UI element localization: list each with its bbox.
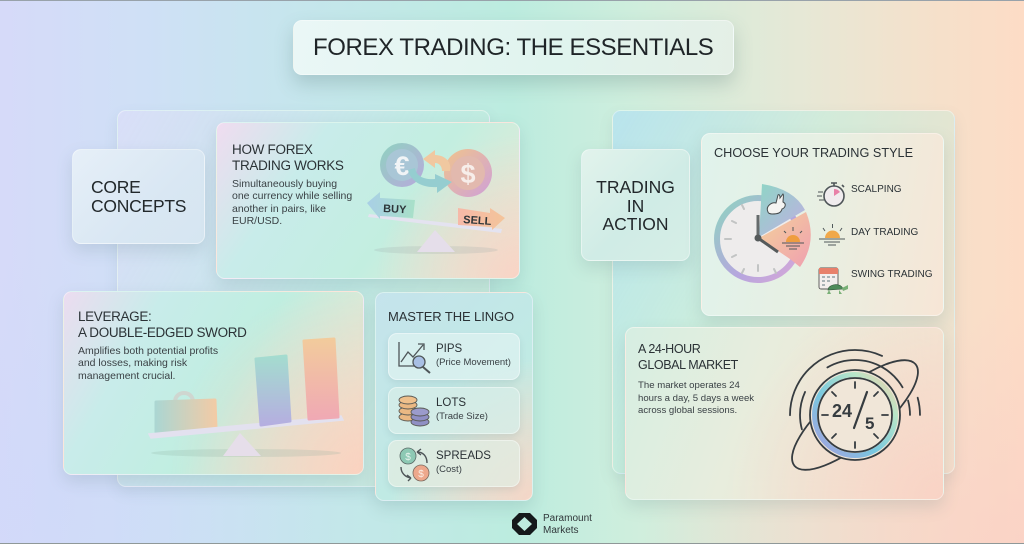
back panel: trading in action [612, 110, 955, 474]
label: brand name: Paramount [543, 513, 592, 524]
label: pips [436, 343, 511, 368]
label: scalping: SCALPING [851, 184, 902, 195]
label: lots: (Trade Size) [436, 411, 488, 422]
icon: currency exchange seesaw: SELL [463, 214, 492, 228]
label: brand name: Markets [543, 524, 579, 536]
text: how forex description [232, 178, 352, 227]
icon: 24/5 clock with orbits: 5 [865, 414, 874, 433]
icon: clock with sectors [714, 184, 811, 283]
row: lots [388, 387, 520, 434]
heading: 24-hour global market [638, 342, 738, 372]
heading: how forex trading works: HOW FOREX [232, 142, 313, 157]
text: how forex description: another in pairs, like [232, 203, 326, 215]
row: spreads [388, 440, 520, 487]
label: pips: PIPS [436, 343, 462, 355]
panel: leverage [63, 291, 364, 475]
icon: logo mark [512, 513, 537, 535]
label: spreads: SPREADS [436, 450, 491, 462]
icon: chart with magnifier [398, 342, 431, 374]
text: market hours description: across global sessions. [638, 405, 737, 416]
panel: trading in action label [581, 149, 690, 261]
label: spreads [436, 450, 491, 475]
label: spreads: (Cost) [436, 464, 462, 475]
heading: 24-hour global market: GLOBAL MARKET [638, 358, 738, 372]
panel: 24-hour global market [625, 327, 944, 500]
title: FOREX TRADING: THE ESSENTIALS [313, 34, 713, 61]
icon: rabbit [767, 194, 785, 214]
text: how forex description: EUR/USD. [232, 215, 282, 227]
style item: scalping [817, 182, 902, 207]
heading: how forex trading works: TRADING WORKS [232, 158, 344, 172]
row: pips [388, 333, 520, 380]
icon: calendar with turtle [818, 268, 848, 294]
logo: paramount markets [512, 513, 592, 536]
back panel: core concepts [117, 110, 490, 487]
text: leverage description: management crucial. [78, 370, 175, 382]
icon: coin stacks [398, 396, 430, 426]
text: how forex description: one currency while selling [232, 190, 352, 202]
icon: currency exchange seesaw: $ [460, 159, 476, 189]
label: lots [436, 397, 488, 422]
panel: choose your trading style [701, 133, 944, 316]
panel: trading in action label: TRADING [596, 177, 675, 197]
panel: core concepts label: CONCEPTS [91, 196, 186, 216]
heading: how forex trading works [232, 142, 344, 172]
text: market hours description: The market operates 24 [638, 380, 740, 391]
icon: 24/5 clock with orbits: 24 [832, 401, 852, 421]
label: day trading: DAY TRADING [851, 227, 918, 238]
icon: currency exchange seesaw: BUY [383, 203, 407, 216]
icon: sunrise [819, 224, 845, 246]
icon: 24/5 clock with orbits [789, 349, 921, 471]
text: leverage description [78, 345, 218, 382]
label: lots: LOTS [436, 397, 466, 409]
text: leverage description: Amplifies both potential profits [78, 345, 218, 357]
icon: coin exchange [400, 448, 430, 482]
style item: day trading [819, 224, 918, 246]
label: pips: (Price Movement) [436, 357, 511, 368]
label: swing trading: SWING TRADING [851, 269, 932, 280]
icon: currency exchange seesaw [367, 143, 505, 254]
text: leverage description: and losses, making risk [78, 357, 187, 369]
title [293, 20, 734, 75]
icon: coin exchange: $ [418, 469, 424, 480]
heading: leverage: A DOUBLE-EDGED SWORD [78, 324, 247, 340]
icon: currency exchange seesaw: € [394, 151, 410, 181]
heading: leverage [78, 309, 247, 340]
label: brand name [543, 513, 592, 536]
icon: leverage seesaw with bars [148, 338, 344, 457]
heading: master the lingo: MASTER THE LINGO [388, 309, 514, 324]
panel: master the lingo [375, 292, 533, 501]
panel: trading in action label: IN [627, 196, 644, 216]
icon: coin exchange: $ [405, 452, 411, 463]
heading: leverage: LEVERAGE: [78, 309, 151, 324]
style item: swing trading [818, 268, 932, 294]
panel: core concepts label: CORE [91, 177, 141, 197]
icon: stopwatch [817, 182, 845, 207]
panel: trading in action label: ACTION [602, 214, 669, 234]
panel: core concepts label [72, 149, 205, 244]
text: how forex description: Simultaneously buying [232, 178, 337, 190]
heading: 24-hour global market: A 24-HOUR [638, 342, 700, 356]
panel: how forex trading works [216, 122, 520, 279]
heading: choose your trading style: CHOOSE YOUR TRADING STYLE [714, 146, 913, 160]
text: market hours description [638, 380, 754, 416]
text: market hours description: hours a day, 5 days a week [638, 392, 754, 404]
